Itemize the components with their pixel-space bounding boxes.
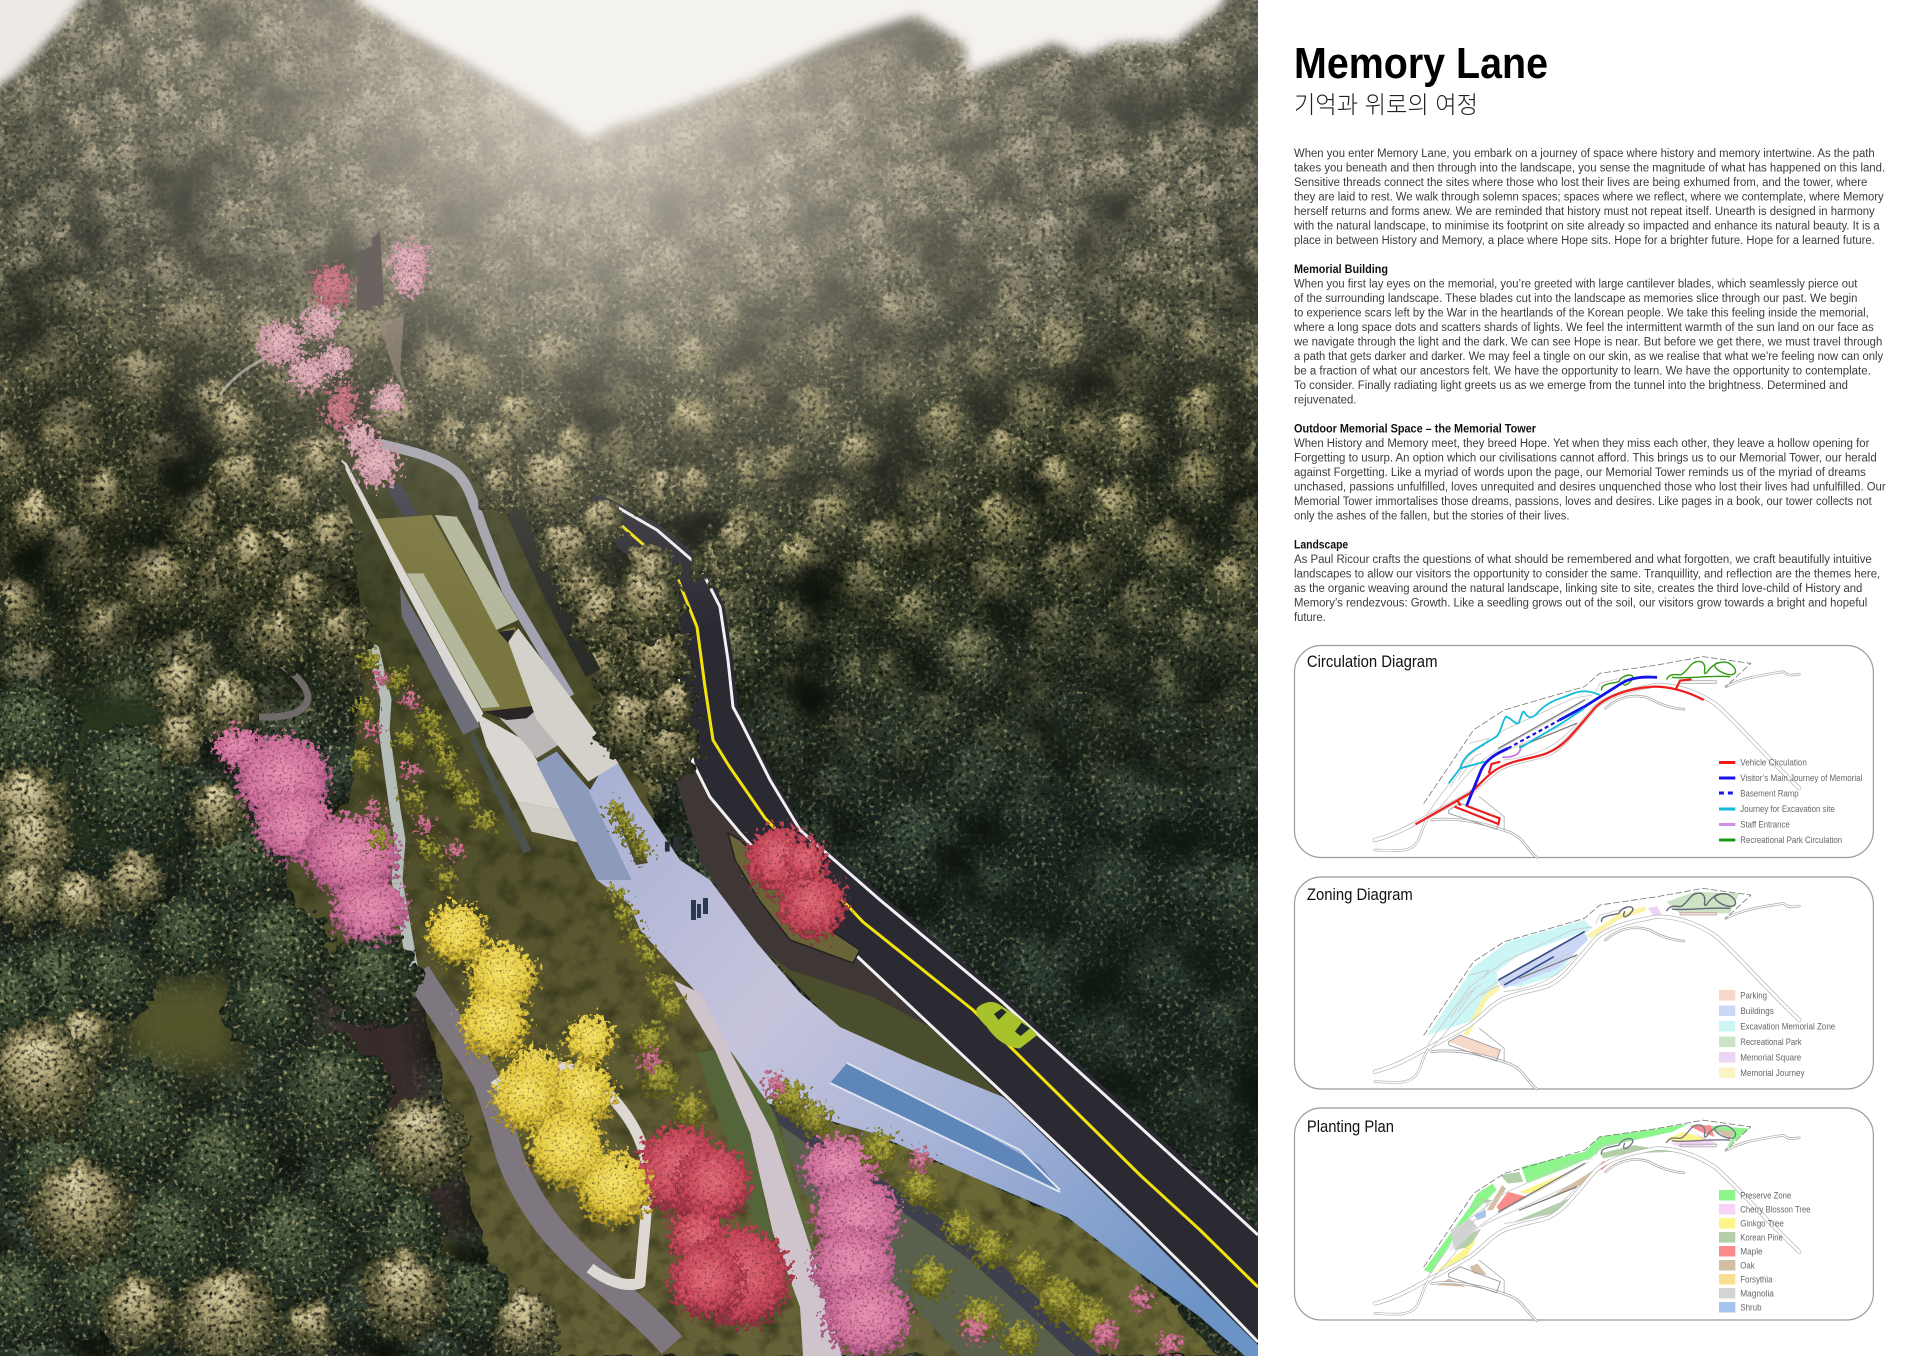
lawn beyond channel: [767, 1103, 1220, 1356]
parking: [1449, 912, 1716, 1062]
site plan with routes: [1375, 657, 1799, 857]
grass wedge between lane and plaza: [767, 953, 1003, 1097]
panel: planting plan: [1294, 1108, 1873, 1321]
dark channel: [770, 1105, 1100, 1356]
legend: circulation: Recreational Park Circulation: [1740, 835, 1842, 846]
green roof: [375, 515, 542, 712]
subtitle in Korean: 기억과 위로의 여정: [1294, 92, 1478, 119]
buildings zone: [1498, 933, 1588, 988]
gravel lane: [676, 761, 928, 1026]
text block: introduction: place in between History and Memory, a place where Hope sits. Hope for a brighter future. Hope for a learned future.: [1294, 233, 1875, 247]
hazy red trees: [312, 266, 357, 428]
legend: planting: Magnolia: [1740, 1288, 1775, 1300]
title: Memory Lane: [1294, 39, 1548, 88]
legend: zoning: Excavation Memorial Zone: [1740, 1021, 1835, 1033]
oak: [1437, 1128, 1734, 1287]
right road edge line: [610, 503, 1258, 1235]
legend: planting: Ginkgo Tree: [1740, 1218, 1784, 1230]
text block: introduction: When you enter Memory Lane, you embark on a journey of space where history and memory intertwine. As the path: [1294, 146, 1875, 160]
text block: introduction: with the natural landscape, to minimise its footprint on site already so impacted and enhance its natural beauty. It is a: [1293, 218, 1880, 233]
building outline: [1498, 932, 1584, 985]
stream: [374, 650, 412, 965]
car: [976, 1002, 1037, 1048]
text block: Memorial Building: we navigate through the light and the dark. We can see Hope is near. But before we get there, we must travel through: [1293, 334, 1882, 349]
text block: introduction: Sensitive threads connect the sites where those who lost their lives are being exhumed from, and the tower, where: [1294, 175, 1867, 189]
lower grey strip: [470, 732, 532, 853]
legend: circulation: Visitor’s Main Journey of Memorial: [1740, 773, 1862, 784]
yellow centre line: [622, 526, 1258, 1287]
meadow patches: [60, 690, 450, 1290]
forest base: [0, 351, 1258, 1356]
blue visitor route: [1467, 677, 1657, 806]
clearing grass around memorial: [284, 444, 960, 1356]
pale loop path: [494, 1066, 648, 1285]
curved left path: [417, 973, 672, 1345]
legend: circulation: Journey for Excavation site: [1740, 804, 1835, 815]
hazy pink trees: [258, 242, 429, 486]
heading: planting: Planting Plan: [1307, 1118, 1394, 1136]
text block: Landscape: as the organic weaving around the natural landscape, linking site to site, creates the third love-child of History and: [1294, 581, 1862, 595]
flowering trees: [214, 650, 1182, 1356]
legend: planting: Oak: [1740, 1260, 1755, 1272]
sky: [0, 0, 1235, 139]
legend: circulation: Staff Entrance: [1740, 819, 1790, 831]
cyan excavation route: [1449, 691, 1600, 783]
legend: planting: Shrub: [1740, 1302, 1762, 1314]
golden meadow: [120, 975, 450, 1290]
notch upper: [498, 630, 515, 643]
panel: circulation diagram: [1294, 646, 1873, 858]
main white mass: [477, 713, 563, 810]
right blade: [508, 628, 618, 782]
yellow-green shrubs: [352, 650, 1110, 1356]
dark ditch: [513, 510, 593, 673]
purple staff route: [1502, 748, 1521, 757]
red vehicle route: [1415, 679, 1704, 824]
text block: Landscape: As Paul Ricour crafts the questions of what should be remembered and what forgotten, we craft beautifully intuitive: [1294, 552, 1872, 566]
upper curved walkway: [377, 443, 570, 697]
legend: planting: [1719, 1190, 1811, 1314]
white blade: [340, 458, 483, 725]
heading: zoning: Zoning Diagram: [1307, 886, 1413, 904]
legend: circulation: Basement Ramp: [1740, 788, 1799, 800]
grey roof facet: [497, 707, 567, 758]
legend: zoning: Memorial Journey: [1740, 1068, 1805, 1079]
text block: introduction: [1293, 146, 1885, 247]
text block: Memorial Building: To consider. Finally radiating light greets us as we emerge from the tunnel into the brightness. Determined and: [1294, 378, 1848, 392]
site plan with zones: [1375, 888, 1799, 1089]
dark meadow: [60, 690, 170, 850]
curved service path near top: [220, 312, 345, 395]
upper blossom trees in haze: [258, 242, 429, 486]
text block: Landscape: [1294, 552, 1880, 624]
text block: Memorial Building: [1293, 276, 1884, 407]
dark notch: [483, 705, 542, 720]
text block: Memorial Tower: Memorial Tower immortalises those dreams, passions, loves and desires. Like pages in a book, our tower collects not: [1294, 494, 1872, 508]
people group one: [665, 837, 679, 852]
flower strip two: [407, 573, 500, 708]
lower blade: [517, 802, 582, 843]
text block: Memorial Building: where a long space dots and scatters shards of lights. We feel the intermittent warmth of the sun land on our face as: [1293, 320, 1874, 334]
legend: zoning: Memorial Square: [1740, 1052, 1801, 1064]
red trees: [636, 826, 846, 1327]
brown shade: [320, 930, 470, 1240]
korean pine: [1454, 1145, 1672, 1250]
text block: Memorial Building: to experience scars left by the War in the heartlands of the Korean people. We take this feeling inside the memorial,: [1294, 305, 1869, 320]
gravel bed: [780, 1125, 1075, 1356]
plaza: [537, 752, 1258, 1356]
text block: Memorial Building: When you first lay eyes on the memorial, you’re greeted with large cantilever blades, which seamlessly pierce out: [1294, 276, 1858, 291]
people group two: [691, 898, 708, 920]
text block: introduction: they are laid to rest. We walk through solemn spaces; spaces where we reflect, where we contemplate, where Memory: [1294, 189, 1884, 204]
flower strip one: [435, 515, 518, 630]
pink trees: [214, 728, 911, 1356]
dark and cream forest trees, lower left: [0, 420, 759, 1356]
legend: circulation: Vehicle Circulation: [1740, 757, 1807, 769]
heading: circulation: Circulation Diagram: [1307, 653, 1437, 671]
recreational park: [1667, 892, 1739, 913]
trees along the upper road: [460, 420, 759, 783]
large scale canopy shadows: [0, 0, 1258, 1356]
memorial square: [1648, 906, 1662, 915]
text block: introduction: takes you beneath and then through into the landscape, you sense the magnitude of what has happened on this land.: [1294, 160, 1885, 175]
preserve zone: [1424, 1124, 1749, 1273]
void rails: [830, 1063, 1060, 1192]
text block: Memorial Tower: [1294, 436, 1886, 523]
legend: planting: Preserve Zone: [1740, 1190, 1791, 1202]
magnolia: [1451, 1130, 1726, 1250]
blue basement ramp: [1508, 720, 1560, 748]
heading: Memorial Building: Memorial Building: [1294, 262, 1388, 276]
legend: planting: Forsythia: [1740, 1274, 1773, 1286]
legend: planting: Cherry Blosson Tree: [1740, 1204, 1811, 1216]
tower: [357, 232, 384, 310]
shrub: [1474, 1209, 1486, 1220]
island with red maples: [728, 833, 860, 963]
legend: zoning: Recreational Park: [1740, 1037, 1802, 1048]
distant haze on the ridges: [0, 0, 1258, 520]
left road edge line: [670, 628, 1258, 1342]
text block: Memorial Tower: unchased, passions unfulfilled, loves unrequited and desires unquenched those who lost their lives had unfulfilled. Our: [1294, 479, 1886, 494]
cherry: [1670, 1138, 1716, 1147]
legend: zoning: Parking: [1740, 990, 1767, 1002]
ginkgo: [1433, 1132, 1711, 1273]
walkway: [537, 752, 632, 880]
forest canopy: [0, 0, 1280, 1356]
text block: Landscape: Memory’s rendezvous: Growth. Like a seedling grows out of the soil, our visitors grow towards a bright and hopeful: [1294, 595, 1867, 610]
legend: planting: Maple: [1740, 1246, 1763, 1258]
panel: aerial rendering of the memorial landscape: [0, 0, 1280, 1356]
memorial building: [340, 443, 679, 880]
text block: introduction: herself returns and forms anew. We are reminded that history must not repeat itself. Unearth is designed in harmony: [1294, 204, 1875, 218]
sky, left corner: [0, 0, 100, 100]
trees between forest and memorial: [210, 445, 372, 670]
green edge strips: [697, 1050, 773, 1240]
text block: Memorial Building: be a fraction of what our ancestors felt. We have the opportunity to learn. We have the opportunity to contemplate.: [1294, 363, 1871, 378]
text block: Landscape: landscapes to allow our visitors the opportunity to consider the same. Tranquillity, and reflection are the themes here,: [1294, 566, 1880, 581]
legend: circulation: [1719, 757, 1862, 846]
dark ramp: [385, 483, 418, 517]
dirt track by tower: [378, 316, 410, 400]
diagonal branch path: [673, 980, 842, 1356]
small meander path: [259, 665, 308, 717]
pink shrubs: [364, 672, 1182, 1356]
excavation zone: [1428, 920, 1592, 1035]
text block: Memorial Tower: only the ashes of the fallen, but the stories of their lives.: [1294, 508, 1569, 523]
text block: Memorial Tower: against Forgetting. Like a myriad of words upon the page, our Memorial Tower reminds us of the myriad of dreams: [1294, 465, 1866, 479]
legend: planting: Korean Pine: [1740, 1232, 1783, 1244]
sky, centre: [356, 0, 1235, 139]
site plan with planting zones: [1375, 1120, 1799, 1321]
planter beside plaza: [612, 805, 648, 865]
memorial journey: [1466, 908, 1646, 1035]
morning haze: [0, 0, 1258, 1356]
legend: zoning: [1719, 990, 1835, 1079]
shadowed forest, lower right: [688, 517, 1258, 1356]
asphalt road: [590, 494, 1258, 1345]
green edge strip right: [730, 1050, 827, 1287]
text block: Memorial Tower: When History and Memory meet, they breed Hope. Yet when they miss each other, they leave a hollow opening for: [1294, 436, 1869, 450]
ginkgo trees: [427, 904, 651, 1225]
sunken void in plaza: [830, 1063, 1060, 1190]
text block: Memorial Building: of the surrounding landscape. These blades cut into the landscape as memories slice through our past. We begin: [1294, 291, 1858, 305]
heading: Outdoor Memorial Space: Outdoor Memorial Space – the Memorial Tower: [1294, 422, 1536, 436]
panel: zoning diagram: [1294, 877, 1873, 1089]
maple: [1497, 1125, 1714, 1212]
green recreational route: [1601, 661, 1736, 690]
legend: zoning: Buildings: [1740, 1006, 1774, 1017]
text block: Memorial Building: a path that gets darker and darker. We may feel a tingle on our skin, as we realise that what we’re feeling now can only: [1294, 349, 1884, 363]
grey wall: [400, 587, 480, 735]
text block: Landscape: future.: [1294, 610, 1326, 624]
text block: Memorial Building: rejuvenated.: [1294, 392, 1356, 407]
heading: Landscape: Landscape: [1294, 538, 1348, 552]
text block: Memorial Tower: Forgetting to usurp. An option which our civilisations cannot afford. This brings us to our Memorial Tower, our herald: [1294, 450, 1877, 465]
